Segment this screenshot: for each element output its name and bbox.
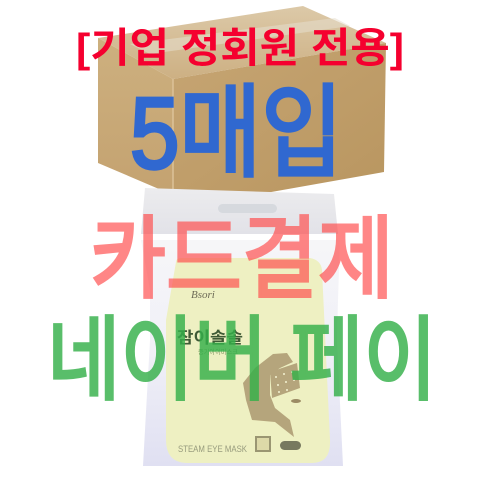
product name: 잠이솔솔 xyxy=(177,329,243,347)
brand: Bsori: Bsori xyxy=(191,289,215,301)
product: steam eye mask package xyxy=(141,188,343,466)
heading: 5 pack: 5매입 xyxy=(130,78,343,190)
package hanger card xyxy=(141,188,338,234)
clear plastic bag xyxy=(141,240,343,466)
heading: corporate member only: [기업 정회원 전용] xyxy=(76,25,404,71)
product subtitle: 증기아이마스크 xyxy=(198,347,238,356)
hanger hole xyxy=(218,204,277,213)
icon: face illustration xyxy=(243,353,301,437)
badge xyxy=(280,441,301,450)
icon: logo stamp xyxy=(256,437,270,451)
yellow mask pouch xyxy=(166,258,330,463)
steam eye mask text: STEAM EYE MASK xyxy=(178,444,247,454)
icon: cardboard box xyxy=(98,6,386,195)
text: card payment: 카드결제 xyxy=(90,210,394,310)
